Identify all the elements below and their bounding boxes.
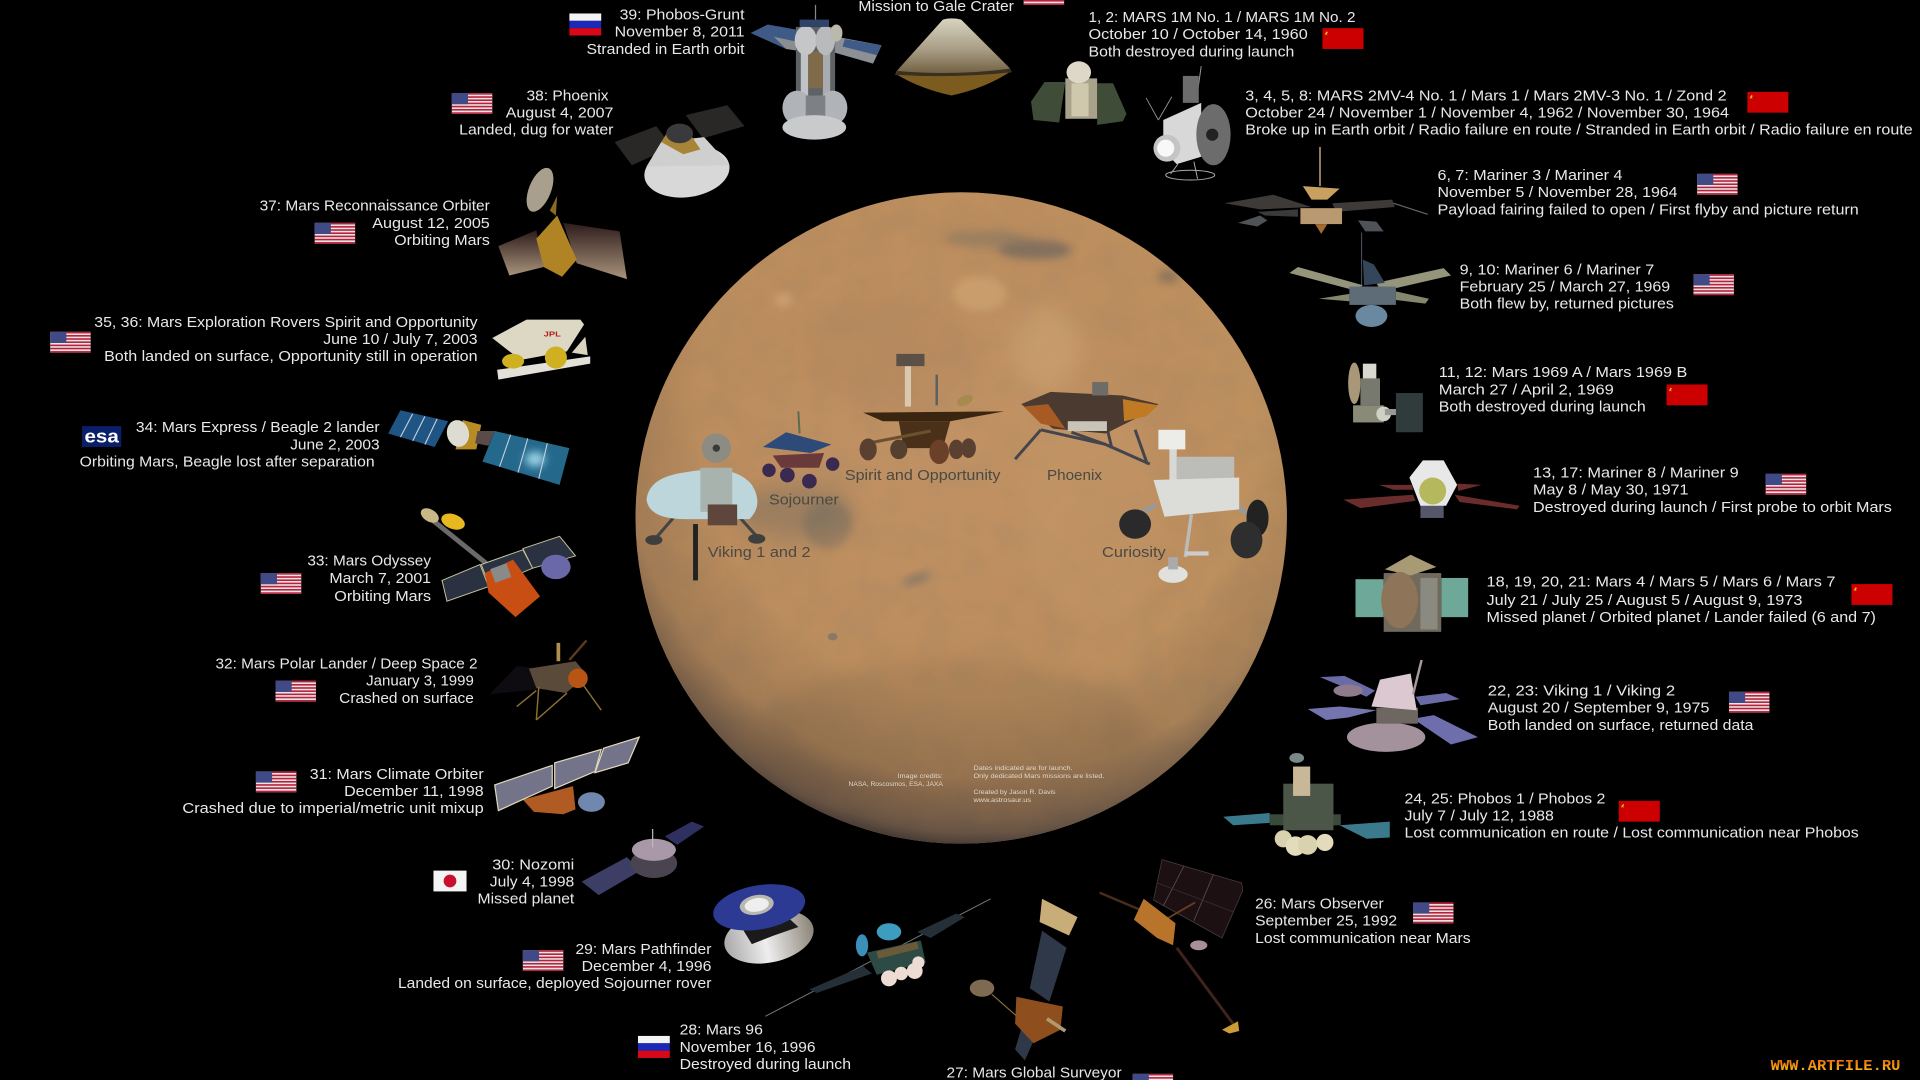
text: missions 22, 23: 22, 23: Viking 1 / Viking 2: [1488, 684, 1675, 700]
text: missions 3, 4, 5, 8: [1245, 88, 1913, 139]
text: missions 9, 10: 9, 10: Mariner 6 / Mariner 7: [1460, 262, 1654, 278]
text: missions 6, 7: 6, 7: Mariner 3 / Mariner 4: [1438, 168, 1622, 184]
spacecraft: Mariner 8 and 9: [1343, 460, 1520, 518]
spacecraft: Nozomi: [582, 822, 704, 895]
spacecraft: Mars Express: [388, 410, 569, 485]
text: missions 13, 17: May 8 / May 30, 1971: [1533, 483, 1689, 499]
text: mission 37: [260, 199, 490, 249]
text: missions 18-21: July 21 / July 25 / August 5 / August 9, 1973: [1487, 593, 1802, 609]
spacecraft: Mariner 6 and 7: [1289, 233, 1451, 327]
spacecraft: Mars 2MV: [1146, 66, 1231, 180]
text: mission 29: December 4, 1996: [582, 959, 711, 975]
text: mission 30: 30: Nozomi: [492, 857, 574, 873]
text: mission 32: Crashed on surface: [339, 691, 474, 707]
text: missions 13, 17: [1533, 466, 1892, 516]
text: mission 34: 34: Mars Express / Beagle 2 lander: [136, 420, 380, 436]
text: mission 39: [569, 8, 744, 58]
rover labels on the planet: [708, 467, 1166, 561]
text: mission 28: Destroyed during launch: [680, 1057, 851, 1073]
rover labels on the planet: Curiosity: [1102, 544, 1166, 561]
text: mission 38: Landed, dug for water: [459, 123, 614, 139]
image credits: Image credits:: [898, 773, 943, 780]
text: mission 32: 32: Mars Polar Lander / Deep Space 2: [216, 657, 478, 673]
text: mission 38: August 4, 2007: [506, 106, 613, 122]
text: mission 38: [452, 88, 614, 139]
text: missions 9, 10: [1460, 262, 1734, 313]
spacecraft: Mars 1969: [1348, 362, 1423, 432]
rover labels on the planet: Viking 1 and 2: [708, 544, 811, 561]
text: mission 37: August 12, 2005: [372, 216, 490, 232]
spacecraft: Mars Odyssey: [418, 505, 576, 617]
text: mission 39: November 8, 2011: [615, 25, 744, 41]
text: missions 1, 2: Both destroyed during launch: [1089, 44, 1294, 60]
notes and author credit: www.astrosaur.us: [972, 797, 1031, 804]
text: missions 22, 23: [1488, 684, 1769, 734]
text: mission 34: esa: [84, 426, 120, 447]
watermark: WWW.ARTFILE.RU: [1771, 1059, 1900, 1075]
text: mission 29: Landed on surface, deployed Sojourner rover: [398, 976, 711, 992]
text: missions 11, 12: [1439, 365, 1708, 415]
text: mission 33: 33: Mars Odyssey: [307, 554, 432, 570]
text: missions 18-21: [1487, 575, 1892, 626]
spacecraft: Spirit and Opportunity cruise stage: JPL: [544, 330, 561, 339]
text: mission 31: December 11, 1998: [344, 784, 484, 800]
text: mission 31: 31: Mars Climate Orbiter: [310, 767, 484, 783]
text: missions 6, 7: Payload fairing failed to open / First flyby and picture return: [1438, 202, 1859, 218]
text: mission 37: Orbiting Mars: [394, 233, 490, 249]
text: mission 39: 39: Phobos-Grunt: [620, 8, 744, 24]
text: missions 35, 36: [50, 315, 478, 365]
text: mission 29: [398, 942, 711, 992]
text: mission 26: September 25, 1992: [1255, 914, 1397, 930]
text: missions 11, 12: March 27 / April 2, 1969: [1439, 382, 1614, 398]
spacecraft: Mars Pathfinder: [710, 878, 819, 971]
spacecraft: Mars 1M: [1031, 61, 1127, 125]
rover: Spirit and Opportunity: [860, 354, 1004, 464]
text: mission 38: 38: Phoenix: [527, 88, 609, 104]
text: missions 24, 25: Lost communication en route / Lost communication near Phobos: [1404, 826, 1859, 842]
text: mission 28: 28: Mars 96: [680, 1023, 763, 1039]
text: missions 22, 23: August 20 / September 9, 1975: [1488, 701, 1709, 717]
text: mission 32: [216, 657, 478, 707]
notes and author credit: [972, 765, 1105, 804]
text: mission 26: [1255, 897, 1471, 947]
image credits: [849, 773, 944, 788]
spacecraft: Mariner 3 and 4: [1224, 147, 1428, 234]
text: missions 6, 7: [1438, 168, 1859, 218]
text: missions 18-21: 18, 19, 20, 21: Mars 4 / Mars 5 / Mars 6 / Mars 7: [1487, 575, 1836, 591]
text: mission 37: 37: Mars Reconnaissance Orbiter: [260, 199, 490, 215]
text: mission 28: November 16, 1996: [680, 1040, 816, 1056]
rover labels on the planet: Spirit and Opportunity: [845, 467, 1001, 484]
rover: Sojourner: [762, 411, 839, 489]
text: missions 13, 17: 13, 17: Mariner 8 / Mariner 9: [1533, 466, 1739, 482]
text: missions 11, 12: 11, 12: Mars 1969 A / Mars 1969 B: [1439, 365, 1687, 381]
text: mission 33: March 7, 2001: [329, 571, 431, 587]
text: missions 13, 17: Destroyed during launch / First probe to orbit Mars: [1533, 500, 1892, 516]
text: mission 39: Stranded in Earth orbit: [587, 42, 744, 58]
text: mission 28: [638, 1023, 851, 1073]
text: missions 24, 25: [1404, 791, 1859, 842]
rover: Curiosity: [1119, 430, 1269, 583]
text: mission 34: Orbiting Mars, Beagle lost after separation: [80, 455, 375, 471]
rover: Phoenix lander: [1015, 382, 1158, 464]
spacecraft: Phobos 1 and 2: [1223, 753, 1390, 856]
text: mission 30: July 4, 1998: [490, 875, 574, 891]
spacecraft: Mars Climate Orbiter: [495, 737, 639, 814]
spacecraft: Mars Global Surveyor: [970, 899, 1078, 1060]
text: mission 30: [433, 857, 574, 908]
spacecraft: Mars 4-7: [1356, 555, 1468, 632]
text: mission 33: [261, 554, 432, 605]
spacecraft: Mars Observer: [1100, 860, 1243, 1033]
text: missions 35, 36: 35, 36: Mars Exploration Rovers Spirit and Opportunity: [94, 315, 478, 331]
image credits: NASA, Roscosmos, ESA, JAXA: [849, 781, 944, 788]
text: missions 3, 4, 5, 8: 3, 4, 5, 8: MARS 2MV-4 No. 1 / Mars 1 / Mars 2MV-3 No. 1 / Zond 2: [1245, 88, 1727, 104]
spacecraft: Phoenix cruise: [615, 105, 744, 203]
text: mission 29: 29: Mars Pathfinder: [576, 942, 711, 958]
notes and author credit: Only dedicated Mars missions are listed.: [973, 773, 1105, 780]
text: missions 3, 4, 5, 8: October 24 / November 1 / November 4, 1962 / November 30, 1964: [1245, 106, 1729, 122]
text: missions 18-21: Missed planet / Orbited planet / Lander failed (6 and 7): [1487, 610, 1876, 626]
spacecraft: Spirit and Opportunity cruise stage: [492, 320, 590, 380]
text: missions 9, 10: February 25 / March 27, 1969: [1460, 279, 1670, 295]
rover labels on the planet: Phoenix: [1047, 467, 1103, 484]
spacecraft: Mars Reconnaissance Orbiter: [498, 164, 627, 279]
text: mission 32: January 3, 1999: [366, 674, 474, 690]
text: mission 26: 26: Mars Observer: [1255, 897, 1384, 913]
planet Mars: [636, 192, 1287, 844]
text: missions 35, 36: Both landed on surface, Opportunity still in operation: [104, 349, 478, 365]
text: missions 6, 7: November 5 / November 28, 1964: [1438, 185, 1678, 201]
text: missions 24, 25: 24, 25: Phobos 1 / Phobos 2: [1404, 791, 1605, 807]
text: mission 34: June 2, 2003: [290, 437, 380, 453]
text: missions 1, 2: 1, 2: MARS 1M No. 1 / MARS 1M No. 2: [1089, 10, 1356, 26]
rover labels on the planet: Sojourner: [769, 491, 839, 508]
text: mission 33: Orbiting Mars: [334, 589, 431, 605]
text: mission 34: [80, 420, 380, 471]
text: missions 1, 2: [1089, 10, 1363, 60]
spacecraft: Phobos-Grunt: [751, 5, 882, 140]
notes and author credit: Created by Jason R. Davis: [973, 789, 1056, 796]
text: mission 31: Crashed due to imperial/metric unit mixup: [182, 801, 484, 817]
text: missions 22, 23: Both landed on surface, returned data: [1488, 718, 1754, 734]
text: mission 30: Missed planet: [478, 892, 574, 908]
text: missions 3, 4, 5, 8: Broke up in Earth orbit / Radio failure en route / Stranded in Earth orbit / Radio failure en route: [1245, 123, 1913, 139]
text: missions 9, 10: Both flew by, returned pictures: [1460, 297, 1674, 313]
text: mission 26: Lost communication near Mars: [1255, 931, 1471, 947]
text: missions 11, 12: Both destroyed during launch: [1439, 399, 1646, 415]
text: missions 24, 25: July 7 / July 12, 1988: [1404, 808, 1554, 824]
spacecraft: Viking orbiter: [1308, 660, 1478, 752]
text: mission 31: [182, 767, 484, 817]
spacecraft: Mars Polar Lander: [490, 640, 601, 720]
spacecraft: Mars 96: [765, 899, 991, 1016]
text: missions 35, 36: June 10 / July 7, 2003: [323, 332, 478, 348]
spacecraft: Curiosity entry capsule: [895, 18, 1011, 96]
rover: Viking lander: [645, 433, 765, 580]
notes and author credit: Dates indicated are for launch.: [973, 765, 1073, 772]
text: missions 1, 2: October 10 / October 14, 1960: [1089, 27, 1308, 43]
